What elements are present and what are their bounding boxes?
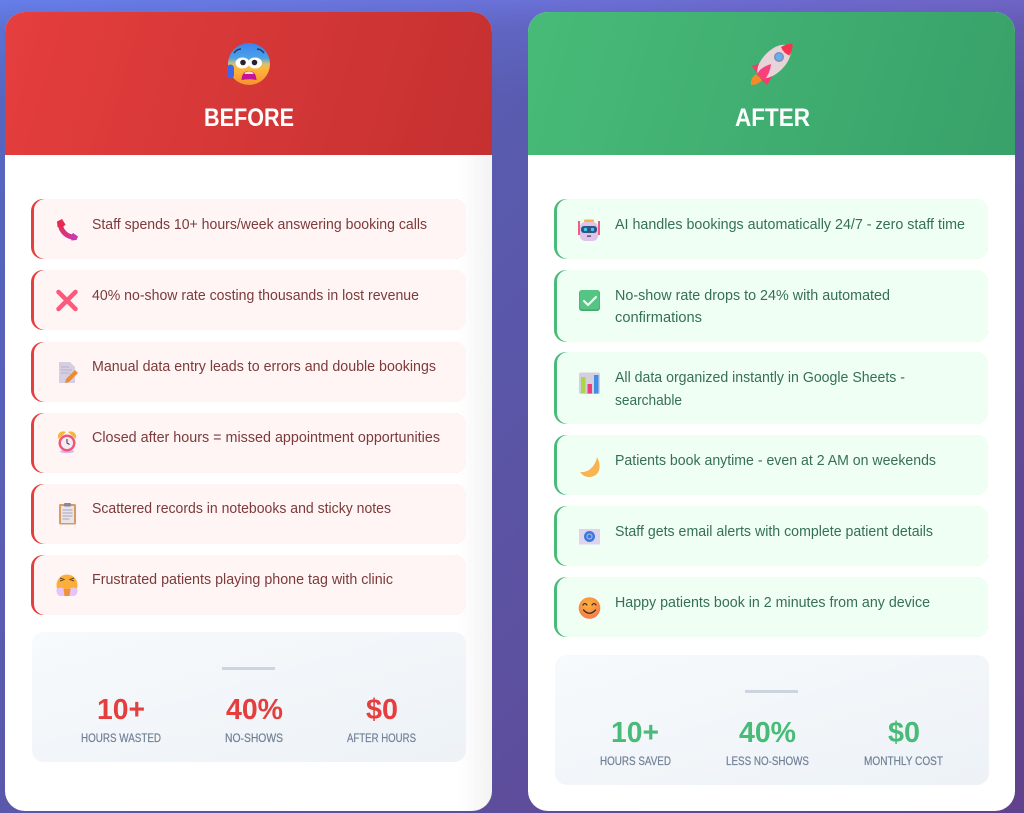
item: no-show rate bbox=[31, 270, 466, 330]
stat: hours saved: HOURS SAVED bbox=[600, 756, 671, 768]
stat: after hours bbox=[347, 694, 416, 745]
icon: cross mark bbox=[58, 292, 76, 309]
item: no-show drop: confirmations bbox=[615, 310, 702, 326]
stat: hours wasted bbox=[81, 694, 161, 745]
item: email alerts: Staff gets email alerts with complete patient details bbox=[615, 524, 933, 540]
item: scattered records: Scattered records in notebooks and sticky notes bbox=[92, 501, 391, 517]
stat: no-shows: 40% bbox=[226, 694, 283, 726]
stat: monthly cost: $0 bbox=[888, 717, 920, 749]
item: booking calls: Staff spends 10+ hours/week answering booking calls bbox=[92, 217, 427, 233]
item: happy patients bbox=[554, 577, 988, 637]
stat: less no-shows: 40% bbox=[739, 717, 796, 749]
item: frustrated patients bbox=[31, 555, 466, 615]
item: scattered records bbox=[31, 484, 466, 544]
panel: after bbox=[528, 12, 1015, 811]
item: manual data entry: Manual data entry leads to errors and double bookings bbox=[92, 359, 436, 375]
item: google sheets bbox=[554, 352, 988, 424]
item: book anytime: Patients book anytime - even at 2 AM on weekends bbox=[615, 453, 936, 469]
stat: hours saved bbox=[600, 717, 671, 768]
icon: check mark bbox=[579, 290, 600, 311]
icon: memo bbox=[59, 362, 78, 383]
icon: rocket bbox=[751, 39, 797, 85]
icon: anxious face bbox=[227, 43, 270, 85]
item: ai bookings bbox=[554, 199, 988, 259]
item: closed after hours bbox=[31, 413, 466, 473]
stat: less no-shows: LESS NO-SHOWS bbox=[726, 756, 809, 768]
item: manual data entry bbox=[31, 342, 466, 402]
item: happy patients: Happy patients book in 2 minutes from any device bbox=[615, 595, 930, 611]
card: after bbox=[528, 12, 1015, 811]
item: email alerts bbox=[554, 506, 988, 566]
item: no-show drop bbox=[554, 270, 988, 342]
icon: clipboard bbox=[59, 503, 76, 524]
item: google sheets: searchable bbox=[615, 393, 682, 409]
item: booking calls bbox=[31, 199, 466, 259]
item: no-show drop: No-show rate drops to 24% with automated bbox=[615, 288, 890, 304]
item: closed after hours: Closed after hours = missed appointment opportunities bbox=[92, 430, 440, 446]
heading: before: BEFORE bbox=[204, 104, 294, 132]
stat: after hours: $0 bbox=[366, 694, 398, 726]
stat: after hours: AFTER HOURS bbox=[347, 733, 416, 745]
icon: bar chart bbox=[579, 372, 600, 394]
icon: telephone bbox=[57, 219, 78, 240]
icon: frustrated face bbox=[56, 574, 78, 596]
item: google sheets: All data organized instantly in Google Sheets - bbox=[615, 370, 905, 386]
stats: before bbox=[32, 632, 466, 762]
stat: hours wasted: HOURS WASTED bbox=[81, 733, 161, 745]
icon: email bbox=[579, 529, 600, 544]
item: no-show rate: 40% no-show rate costing thousands in lost revenue bbox=[92, 288, 419, 304]
header: after bbox=[528, 12, 1015, 155]
heading: after: AFTER bbox=[735, 104, 810, 132]
panel: before bbox=[5, 12, 492, 811]
item: book anytime bbox=[554, 435, 988, 495]
stat: no-shows: NO-SHOWS bbox=[225, 733, 283, 745]
icon: crescent moon bbox=[580, 457, 600, 477]
stat: hours wasted: 10+ bbox=[97, 694, 145, 726]
stat: monthly cost bbox=[864, 717, 943, 768]
stat: no-shows bbox=[225, 694, 283, 745]
icon: robot bbox=[579, 220, 599, 241]
item: frustrated patients: Frustrated patients playing phone tag with clinic bbox=[92, 572, 393, 588]
stat: hours saved: 10+ bbox=[611, 717, 659, 749]
stat: less no-shows bbox=[726, 717, 809, 768]
icon: alarm clock bbox=[58, 432, 76, 453]
header: before bbox=[5, 12, 492, 155]
card: before bbox=[5, 12, 492, 811]
icon: smiling face bbox=[579, 597, 600, 619]
stat: monthly cost: MONTHLY COST bbox=[864, 756, 943, 768]
item: ai bookings: AI handles bookings automatically 24/7 - zero staff time bbox=[615, 217, 965, 233]
stats: after bbox=[555, 655, 989, 785]
